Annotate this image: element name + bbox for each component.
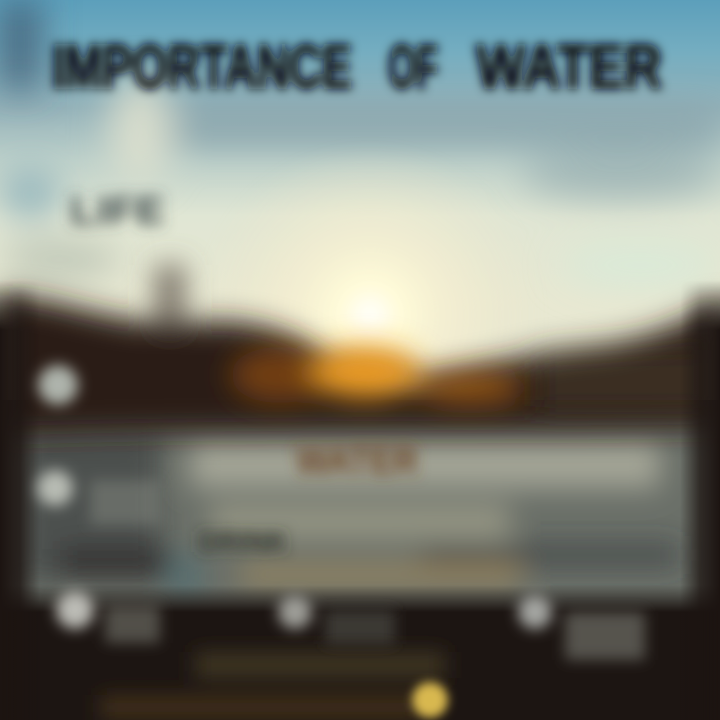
title: IMPORTANCE (52, 33, 352, 102)
orange glow on horizon (230, 346, 525, 404)
water highlights (20, 430, 680, 600)
title: WATER (476, 33, 662, 102)
title (52, 33, 662, 102)
item: bottom right (518, 595, 645, 660)
label: centre middle: DRINK (198, 526, 288, 559)
sun (200, 145, 540, 485)
title: OF (388, 33, 438, 102)
right dark edge (682, 282, 720, 610)
clouds (0, 0, 720, 287)
left dark edge (0, 282, 38, 610)
icon: middle row left (37, 470, 160, 525)
item: bottom left (56, 591, 160, 643)
icon: top row left (38, 365, 78, 405)
dark land silhouette (0, 265, 720, 436)
bottom dark band (0, 585, 720, 720)
water (0, 400, 720, 620)
section heading: centre water: WATER (296, 439, 418, 483)
item: bottom centre (278, 595, 395, 644)
bottom caption glow (100, 652, 445, 720)
icon: gold sun reflection (412, 682, 448, 718)
subheading: top left: LIFE (70, 189, 165, 233)
